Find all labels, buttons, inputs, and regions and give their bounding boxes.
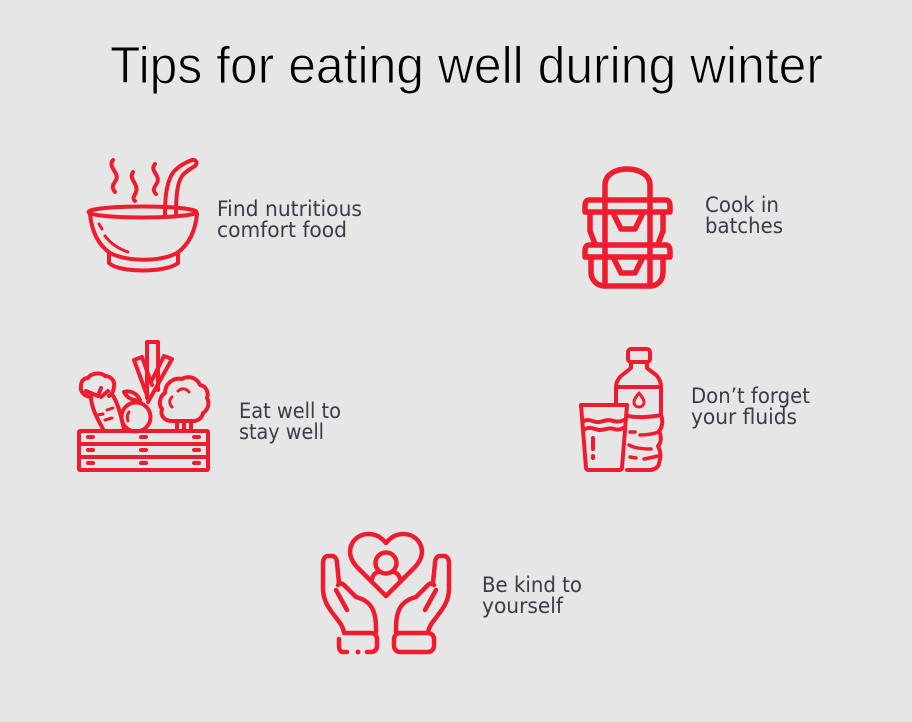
label: eat well to stay well xyxy=(239,399,341,444)
label: cook in batches: Cook in xyxy=(705,193,779,217)
label: don't forget your fluids xyxy=(691,384,810,429)
label: eat well to stay well: stay well xyxy=(239,420,324,444)
icon: hands holding heart xyxy=(323,534,449,652)
label: eat well to stay well: Eat well to xyxy=(239,399,341,423)
label: find nutritious comfort food xyxy=(217,197,362,242)
label: cook in batches: batches xyxy=(705,214,783,238)
icon: stacked food containers xyxy=(585,169,670,286)
icon: vegetable crate xyxy=(79,342,208,470)
label: don't forget your fluids: your fluids xyxy=(691,405,797,429)
label: be kind to yourself: Be kind to xyxy=(482,573,582,597)
title: Tips for eating well during winter xyxy=(110,37,823,95)
label: cook in batches xyxy=(705,193,783,238)
icon: water bottle and glass xyxy=(581,349,662,470)
label: don't forget your fluids: Don’t forget xyxy=(691,384,810,408)
label: be kind to yourself xyxy=(482,573,582,618)
label: be kind to yourself: yourself xyxy=(482,594,564,618)
label: find nutritious comfort food: comfort food xyxy=(217,218,347,242)
label: find nutritious comfort food: Find nutritious xyxy=(217,197,362,221)
icon: soup bowl xyxy=(88,160,197,270)
